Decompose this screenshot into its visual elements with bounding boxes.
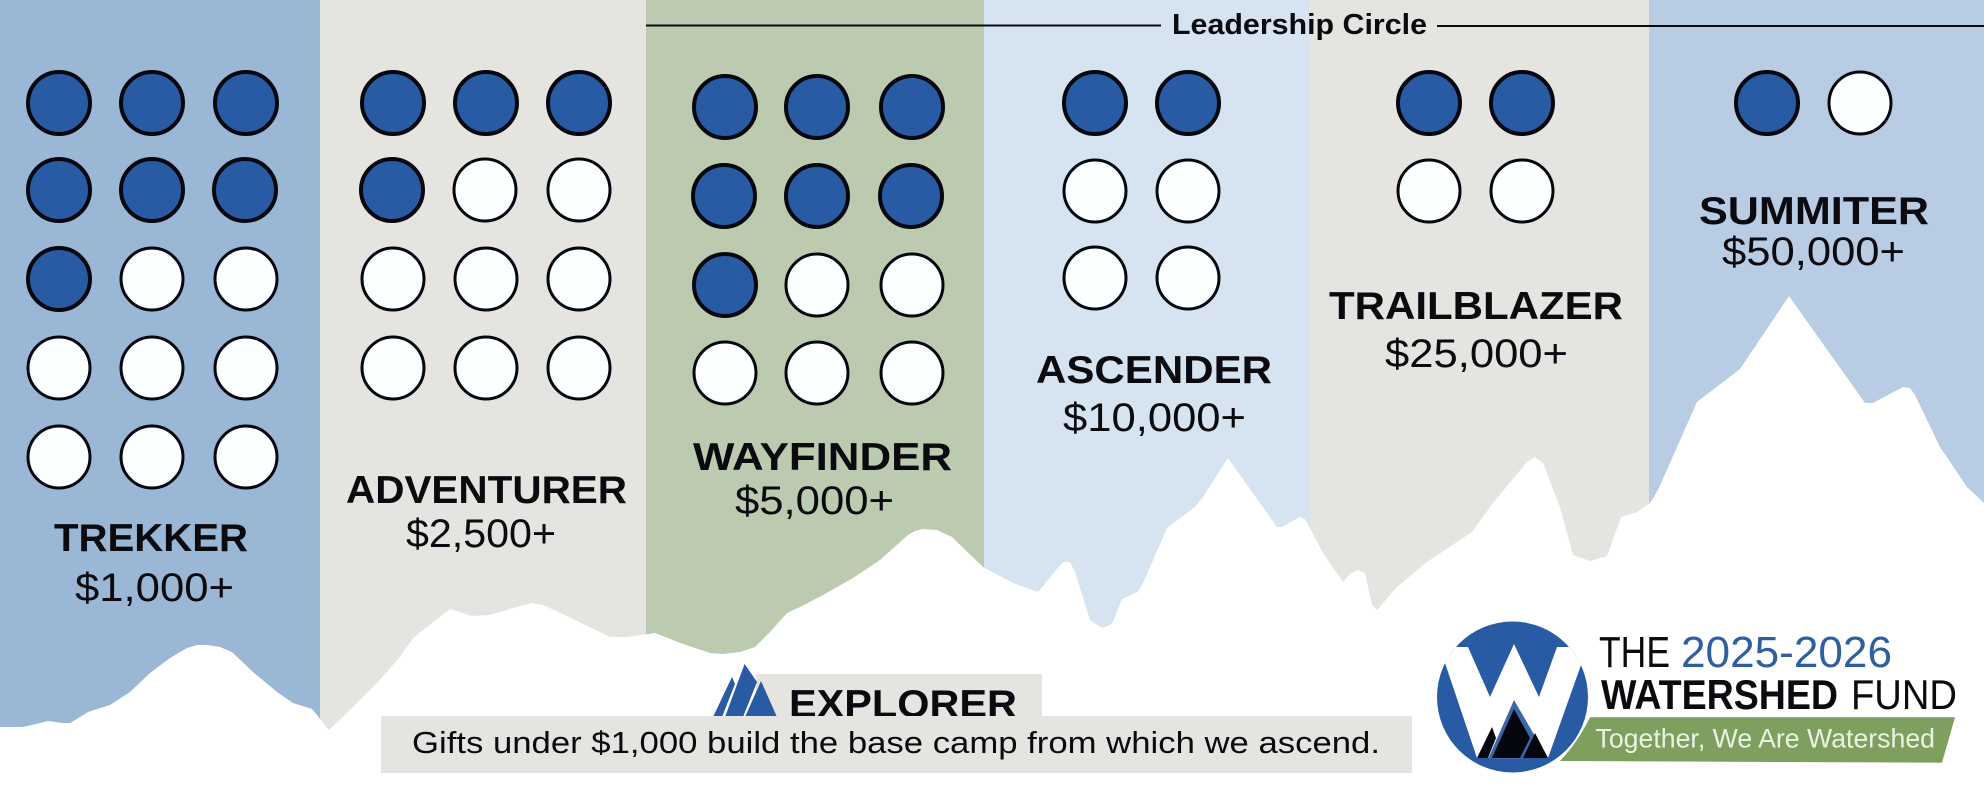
Summiter progress circles (1736, 72, 1891, 134)
Trailblazer progress circles (1398, 72, 1553, 222)
Summiter label: SUMMITER (1699, 190, 1929, 233)
panel: Adventurer (320, 0, 646, 740)
Adventurer label: $2,500+ (406, 512, 556, 556)
panel: Ascender (984, 0, 1310, 740)
icon: W mountain emblem (1437, 622, 1588, 772)
Trailblazer label: TRAILBLAZER (1329, 285, 1623, 328)
tagline banner (1560, 717, 1955, 763)
Trailblazer label (1329, 285, 1623, 376)
white mountain range (0, 296, 1984, 792)
Wayfinder progress circles (693, 76, 943, 404)
Trekker label: TREKKER (54, 517, 248, 560)
panel: Summiter (1649, 0, 1984, 740)
panel: Trekker (0, 0, 320, 740)
Adventurer label (346, 469, 627, 556)
panel: Wayfinder (646, 0, 984, 740)
Adventurer label: ADVENTURER (346, 469, 627, 512)
Trekker label (54, 517, 248, 610)
Wayfinder label (693, 436, 952, 523)
Explorer description (381, 716, 1412, 773)
logo: The 2025-2026 Watershed Fund (1437, 622, 1957, 772)
Ascender label (1036, 349, 1272, 440)
Ascender label: ASCENDER (1036, 349, 1272, 392)
logo title: FUND (1851, 671, 1957, 718)
panel: Trailblazer (1310, 0, 1649, 740)
logo title: THE (1599, 628, 1670, 677)
logo title: 2025-2026 (1681, 628, 1892, 677)
logo title (1599, 628, 1957, 718)
Explorer heading: EXPLORER (789, 683, 1017, 726)
Adventurer progress circles (361, 72, 610, 399)
Trailblazer label: $25,000+ (1385, 332, 1568, 376)
Explorer heading plate (756, 674, 1042, 718)
Ascender label: $10,000+ (1063, 396, 1246, 440)
Explorer description: Gifts under $1,000 build the base camp from which we ascend. (412, 725, 1380, 760)
logo title: WATERSHED (1601, 671, 1838, 718)
icon: Explorer mountains (713, 664, 777, 717)
Leadership Circle bracket: Leadership Circle (1172, 9, 1427, 41)
Summiter label: $50,000+ (1722, 230, 1905, 274)
Trekker progress circles (28, 72, 277, 488)
Summiter label (1699, 190, 1929, 274)
Wayfinder label: $5,000+ (735, 479, 894, 523)
Explorer tier (381, 664, 1412, 773)
Trekker label: $1,000+ (75, 566, 234, 610)
Ascender progress circles (1064, 72, 1219, 309)
Wayfinder label: WAYFINDER (693, 436, 952, 479)
tagline banner: Together, We Are Watershed (1596, 724, 1935, 754)
